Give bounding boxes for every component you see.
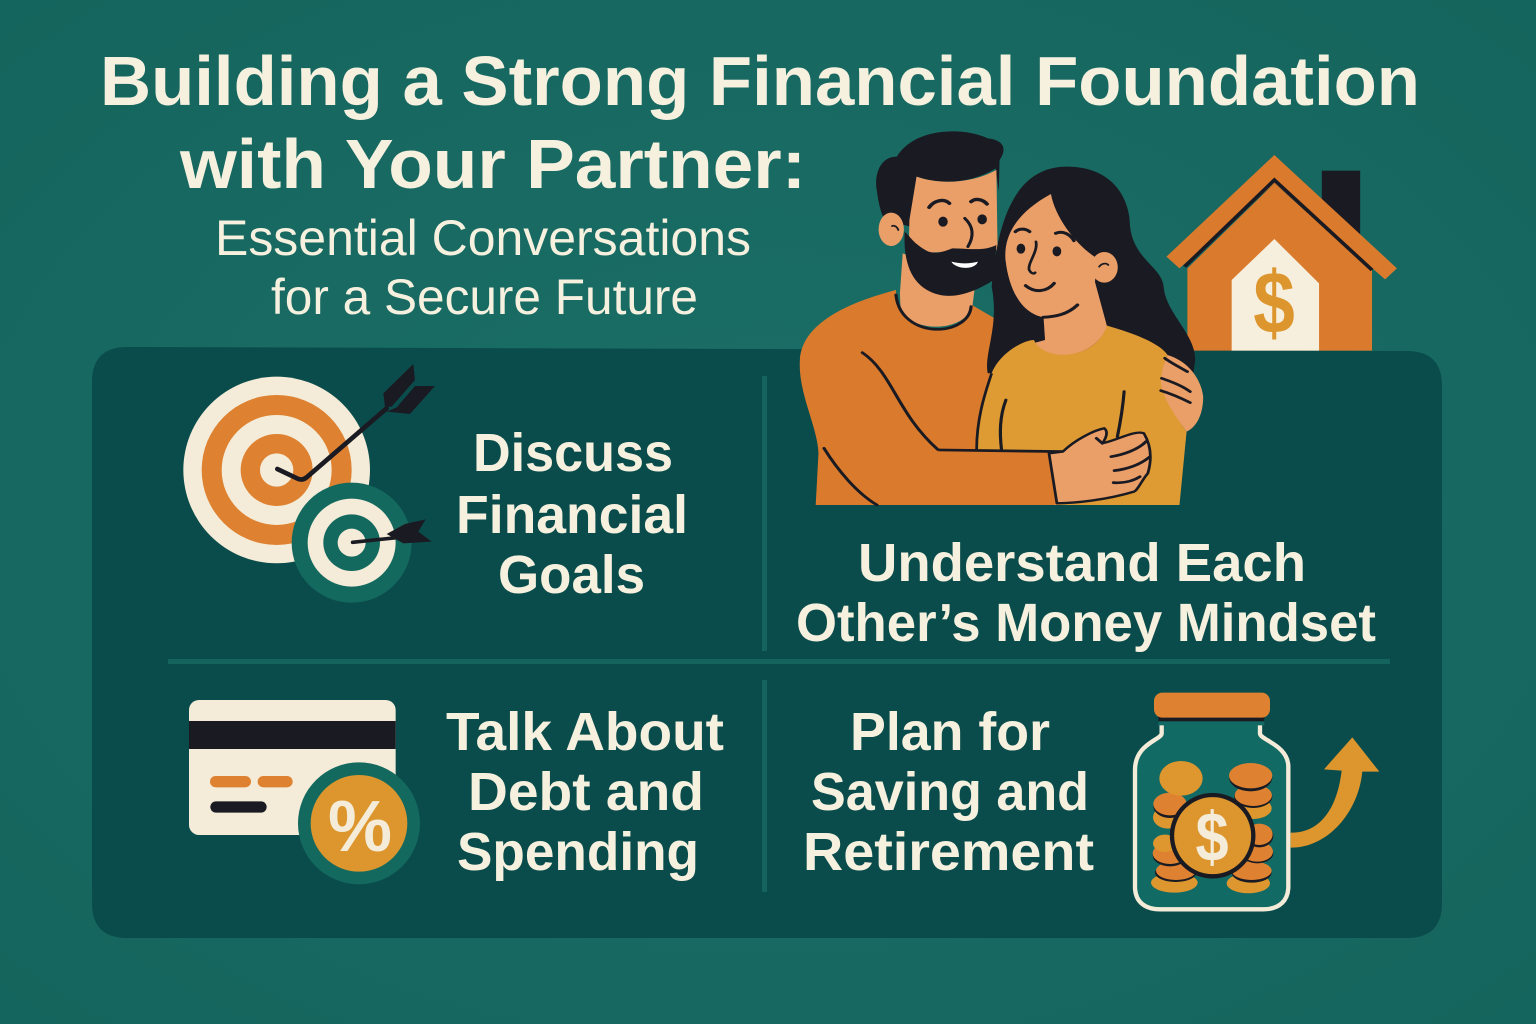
icon: percent sign: %	[328, 787, 392, 867]
title: with Your Partner:	[179, 125, 806, 203]
man beard	[904, 232, 996, 296]
small arrow	[353, 537, 400, 542]
label: debt and spending	[446, 702, 724, 882]
man hand on arm	[1049, 428, 1150, 503]
man fingers on shoulder	[1161, 358, 1190, 403]
coins left	[1151, 873, 1198, 893]
woman neck	[1033, 280, 1107, 356]
man face	[909, 170, 998, 253]
icon: coin dollar sign: $	[1195, 797, 1229, 876]
title: Building a Strong Financial Foundation	[100, 42, 1420, 120]
label: saving and retirement: Saving and	[811, 762, 1089, 822]
coins right	[1227, 873, 1270, 893]
man forearm	[909, 450, 1065, 505]
subtitle: for a Secure Future	[271, 269, 698, 325]
label: debt and spending: Debt and	[468, 762, 704, 822]
label: debt and spending: Talk About	[446, 702, 724, 762]
subtitle: Essential Conversations	[215, 210, 751, 266]
man sweater	[800, 290, 1067, 505]
growth arrow	[1291, 737, 1379, 848]
icon: house dollar sign: $	[1253, 254, 1295, 352]
illustration: house	[1166, 155, 1397, 351]
icon: savings jar with growth arrow	[1135, 693, 1379, 909]
big coin	[1172, 795, 1253, 876]
title	[100, 42, 1420, 203]
illustration: couple	[800, 131, 1203, 505]
icon: credit card	[189, 700, 420, 884]
man hand on shoulder	[1161, 355, 1203, 432]
icon: dartboards	[183, 364, 435, 603]
panel: conversations	[92, 347, 1442, 938]
label: money mindset	[796, 533, 1376, 653]
subtitle	[215, 210, 751, 325]
jar	[1135, 722, 1288, 909]
label: saving and retirement	[803, 702, 1094, 882]
label: discuss financial goals: Goals	[498, 545, 645, 605]
woman hair	[987, 167, 1195, 373]
man hair	[876, 131, 1004, 227]
man eyes, brows, nose	[892, 199, 987, 247]
label: debt and spending: Spending	[457, 822, 699, 882]
label: discuss financial goals	[456, 423, 688, 605]
woman face	[1091, 252, 1118, 283]
label: discuss financial goals: Financial	[456, 485, 688, 545]
label: discuss financial goals: Discuss	[473, 423, 673, 483]
man neck and ear	[900, 253, 976, 327]
woman sweater	[976, 326, 1187, 505]
label: money mindset: Understand Each	[858, 533, 1306, 593]
label: saving and retirement: Retirement	[803, 822, 1094, 882]
big arrow	[277, 408, 387, 480]
label: saving and retirement: Plan for	[850, 702, 1050, 762]
label: money mindset: Other’s Money Mindset	[796, 593, 1376, 653]
